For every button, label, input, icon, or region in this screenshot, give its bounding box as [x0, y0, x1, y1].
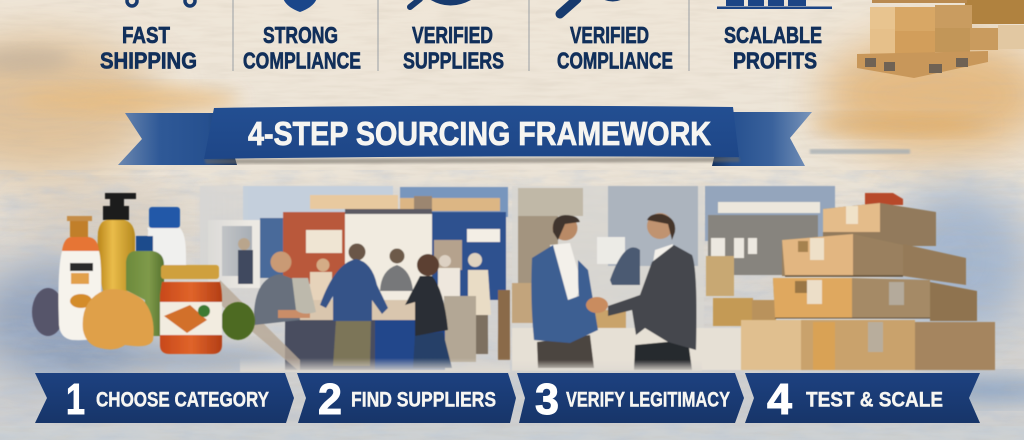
label: verified suppliers: SUPPLIERS: [403, 48, 504, 74]
person: grey suit man: [380, 248, 413, 291]
label: verified compliance: COMPLIANCE: [557, 48, 673, 74]
person: man in dark suit: [608, 213, 696, 370]
label: fast shipping: [100, 22, 197, 74]
step 2: 2: [318, 375, 342, 424]
step 1: 1: [66, 375, 85, 424]
icon: bar chart: [717, 0, 832, 9]
person: man in blue jacket: [531, 215, 598, 368]
ribbon right tail: [712, 112, 812, 166]
orange and white bottle: [58, 216, 101, 340]
box: red small on top: [865, 193, 903, 205]
box: bottom right: [915, 322, 995, 370]
warehouse backdrop: [512, 186, 835, 370]
scene: warehouse handshake: [512, 186, 835, 371]
step 3: [517, 373, 744, 424]
step 1: [35, 373, 294, 424]
label: fast shipping: FAST: [122, 22, 170, 48]
icon: shield: [283, 0, 317, 12]
handshake: [586, 297, 608, 313]
box: middle: [773, 278, 930, 318]
box: middle right: [930, 282, 977, 321]
booth backdrop: [200, 186, 508, 335]
yellow pump bottle: [98, 193, 136, 294]
avocado dark: [32, 288, 64, 336]
label: verified compliance: [557, 22, 673, 74]
pallet of boxes, top right: [857, 0, 1024, 78]
label: verified compliance: VERIFIED: [570, 22, 649, 48]
title text: 4-STEP SOURCING FRAMEWORK: [248, 115, 711, 152]
white bottle blue cap: [147, 207, 186, 275]
scene: trade show: [200, 186, 510, 372]
label: verified suppliers: VERIFIED: [412, 22, 493, 48]
bread roll: [83, 289, 154, 349]
step 4: [745, 373, 980, 424]
dividers: [233, 0, 689, 71]
person: woman in black: [405, 254, 452, 368]
step 4: 4: [767, 375, 793, 424]
person: blue jacket man: [320, 244, 388, 366]
label: verified suppliers: [403, 22, 504, 74]
avocado green: [221, 302, 255, 340]
step 2: FIND SUPPLIERS: [351, 388, 496, 412]
step 1: CHOOSE CATEGORY: [96, 388, 269, 412]
label: strong compliance: STRONG: [263, 22, 338, 48]
box: bottom: [741, 320, 915, 370]
step 2: [297, 373, 516, 424]
label: scalable profits: [724, 22, 822, 74]
label: scalable profits: SCALABLE: [724, 22, 822, 48]
label: strong compliance: COMPLIANCE: [243, 48, 361, 74]
label: strong compliance: [243, 22, 361, 74]
stacked cardboard boxes: [741, 193, 995, 370]
label: scalable profits: PROFITS: [733, 48, 817, 74]
step 4: TEST & SCALE: [806, 388, 943, 412]
icon: magnifier and check: [560, 0, 625, 14]
step 3: 3: [535, 375, 559, 424]
products group: [32, 193, 255, 354]
green bottle: [126, 236, 164, 336]
ribbon main band: [204, 106, 739, 159]
icon: truck wheels: [127, 0, 195, 6]
top feature row: [100, 0, 832, 74]
back figures: [238, 238, 510, 360]
jar of sauce: [160, 265, 222, 354]
ribbon left tail: [118, 113, 237, 165]
title ribbon: [118, 106, 812, 166]
step 3: VERIFY LEGITIMACY: [566, 388, 730, 412]
table and counter: [215, 280, 476, 372]
icon: magnifier: [410, 0, 472, 7]
box: upper: [782, 234, 903, 276]
label: fast shipping: SHIPPING: [100, 48, 197, 74]
box: upper right: [903, 244, 966, 285]
step banners: [35, 373, 980, 424]
box: top: [823, 203, 936, 246]
person: seated man: [254, 252, 316, 325]
